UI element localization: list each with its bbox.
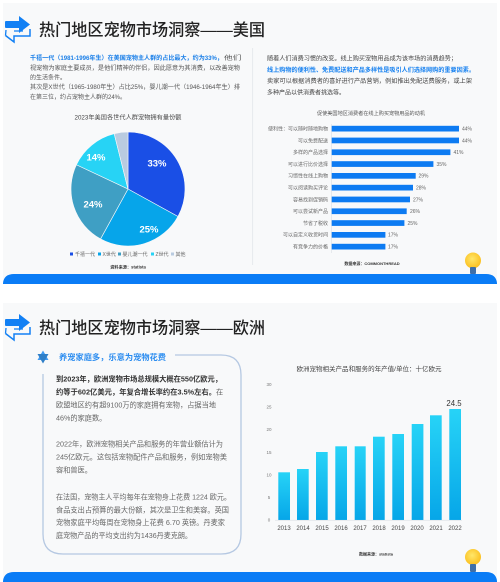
bar chart: motivations: 17% — [388, 233, 399, 239]
column chart: Europe revenue: 24.5 — [446, 399, 462, 408]
icon: light bulb Europe — [465, 549, 481, 572]
icon: arrows Europe — [5, 314, 30, 340]
bar chart: motivations: 可以自定义收货时间 — [283, 232, 328, 239]
bar chart: motivations: 44% — [462, 138, 473, 144]
column chart: Europe revenue: 5 — [268, 495, 271, 500]
pie chart: 25% — [139, 224, 159, 236]
panel outline — [43, 355, 241, 554]
source: motivation bars: 数据来源：COMMONTHREAD — [344, 260, 400, 266]
text block: online trend: 多种产品以供消费者挑选等。 — [267, 88, 345, 96]
pie legend: 千禧一代 — [75, 251, 95, 258]
text block: Europe market: 食品支出占预算的最大份额，其次是卫生和美容。英国 — [56, 506, 229, 514]
title: USA: 热门地区宠物市场洞察——美国 — [39, 20, 265, 40]
column chart: Europe revenue: 15 — [266, 450, 272, 455]
icon: star — [38, 350, 48, 364]
bar chart: motivations: 可以进行比价选择 — [288, 161, 328, 168]
bar chart: motivations: 节省了税收 — [303, 220, 328, 227]
pie legend: Z世代 — [156, 251, 169, 258]
column chart: Europe revenue: 2016 — [334, 526, 348, 532]
bar chart: motivations: 25% — [408, 221, 418, 227]
bar chart: motivations: 有竞争力的价格 — [293, 244, 328, 250]
pie chart — [71, 132, 185, 246]
panel: Europe slide — [3, 303, 497, 582]
bar chart: motivations: 容易找到促销码 — [293, 196, 328, 203]
column chart: Europe revenue: 2021 — [429, 526, 443, 532]
column chart: Europe revenue: 2020 — [410, 526, 424, 532]
pie legend: X世代 — [102, 251, 116, 258]
heading: Europe panel: 养宠家庭多，乐意为宠物花费 — [59, 352, 166, 362]
icon: light bulb USA — [465, 252, 481, 274]
pie legend: 其他 — [176, 251, 186, 258]
chart title: motivation bars: 促使美国地区消费者在线上购买宠物用品的动机 — [317, 109, 426, 117]
text block: generations: 的生活条件。 — [30, 74, 66, 82]
column chart: Europe revenue — [266, 382, 462, 532]
text block: Europe market: 宠物家庭平均每周在宠物身上花费 6.70 英镑。丹麦家 — [56, 518, 225, 527]
text block: online trend: 线上购物的便利性、免费配送和产品多样性是吸引人们选择网购的重要因素。 — [267, 66, 475, 74]
chart title: pie: 2023年美国各世代人群宠物拥有量份额 — [74, 114, 182, 122]
text block: Europe market — [56, 374, 231, 540]
text block: generations: 他们 — [224, 54, 242, 62]
text block: generations: 视宠物为家庭主要成员，是他们精神的伴侣，因此愿意为其消费，以改善宠物 — [30, 64, 240, 72]
bar chart: motivations: 26% — [410, 209, 421, 215]
panel: USA slide — [3, 3, 497, 284]
text block: Europe market: 2022年，欧洲宠物相关产品和服务的年营业额估计为 — [56, 440, 223, 448]
icon: arrows USA — [5, 16, 30, 42]
column chart: Europe revenue: 2022 — [448, 526, 462, 532]
bar chart: motivations: 29% — [418, 174, 429, 180]
pie chart: 33% — [147, 158, 167, 170]
pie legend — [70, 251, 186, 258]
text block: Europe market: 容和兽医。 — [56, 466, 92, 474]
bar chart: motivations: 便利性：可以随时随地购物 — [268, 126, 328, 132]
column chart: Europe revenue: 2014 — [296, 526, 310, 532]
text block: Europe market: 庭宠物产品的平均支出约为1436丹麦克朗。 — [56, 531, 192, 540]
footer bar: USA slide — [3, 274, 497, 284]
text block: Europe market: 245亿欧元。这包括宠物配件产品和服务，例如宠物美 — [56, 452, 227, 462]
text block: generations: 千禧一代（1981-1996年生）在美国宠物主人群的占比最大，约为33%， — [30, 54, 223, 62]
bar chart: motivations: 可以阅读购买评论 — [288, 184, 328, 192]
bar chart: motivations: 27% — [413, 197, 424, 203]
text block: online trend: 卖家可以根据消费者的喜好进行产品营销，例如推出免配送费服务，或上架 — [267, 77, 472, 85]
column chart: Europe revenue: 20 — [266, 427, 272, 432]
column chart: Europe revenue: 30 — [266, 382, 272, 387]
bar chart: motivations: 35% — [436, 162, 447, 168]
pie chart: 14% — [86, 152, 106, 164]
column chart: Europe revenue: 2019 — [391, 526, 405, 532]
column chart: Europe revenue: 10 — [266, 472, 272, 478]
text block: online trend: 随着人们消费习惯的改变。线上购买宠物用品成为该市场的消费趋势； — [267, 54, 457, 62]
text block: generations: 在第三位，约占宠物主人群的24%。 — [30, 93, 126, 101]
bar chart: motivations — [268, 124, 473, 253]
text block: Europe market: 欧盟地区约有超9100万的家庭拥有宠物，占据当地 — [56, 400, 216, 410]
column chart: Europe revenue: 2013 — [277, 526, 291, 532]
pie chart: 24% — [83, 200, 103, 210]
pie legend: 婴儿潮一代 — [122, 251, 148, 258]
bar chart: motivations: 17% — [388, 244, 399, 250]
title: Europe: 热门地区宠物市场洞察——欧洲 — [39, 318, 265, 338]
column chart: Europe revenue: 2018 — [372, 526, 386, 532]
text block: generations — [30, 54, 242, 101]
text block: Europe market: 约等于602亿美元，年复合增长率约在3.5%左右。 — [56, 388, 216, 396]
column chart: Europe revenue: 25 — [266, 404, 272, 410]
source: Europe columns: 数据来源：statista — [359, 550, 394, 556]
bar chart: motivations: 可以免费配送 — [298, 137, 328, 144]
text block: Europe market: 在法国，宠物主人平均每年在宠物身上花费 1224 欧元。 — [56, 492, 231, 502]
column chart: Europe revenue: 0 — [268, 518, 271, 522]
bar chart: motivations: 多样的产品选择 — [293, 149, 328, 156]
text block: Europe market: 到2023年，欧洲宠物市场总规模大概在550亿欧元， — [56, 374, 222, 384]
text block: generations: 其次是X世代（1965-1980年生）占比25%，婴儿潮一代（1946-1964年生）排 — [30, 83, 240, 91]
source: pie: 资料来源：statista — [110, 264, 146, 270]
bar chart: motivations: 44% — [462, 126, 473, 132]
text block: online trend — [267, 54, 475, 96]
bar chart: motivations: 41% — [454, 150, 464, 156]
bar chart: motivations: 28% — [416, 186, 427, 192]
footer bar: Europe slide — [3, 572, 497, 582]
chart title: Europe columns: 欧洲宠物相关产品和服务的年产值/单位：十亿欧元 — [296, 364, 442, 373]
bar chart: motivations: 可以尝试新产品 — [293, 208, 328, 215]
text block: Europe market: 46%的家庭数。 — [56, 414, 106, 422]
text block: Europe market: 在 — [216, 388, 223, 396]
column chart: Europe revenue: 2017 — [353, 526, 367, 532]
bar chart: motivations: 习惯性在线上购物 — [288, 173, 328, 180]
column chart: Europe revenue: 2015 — [315, 526, 329, 532]
